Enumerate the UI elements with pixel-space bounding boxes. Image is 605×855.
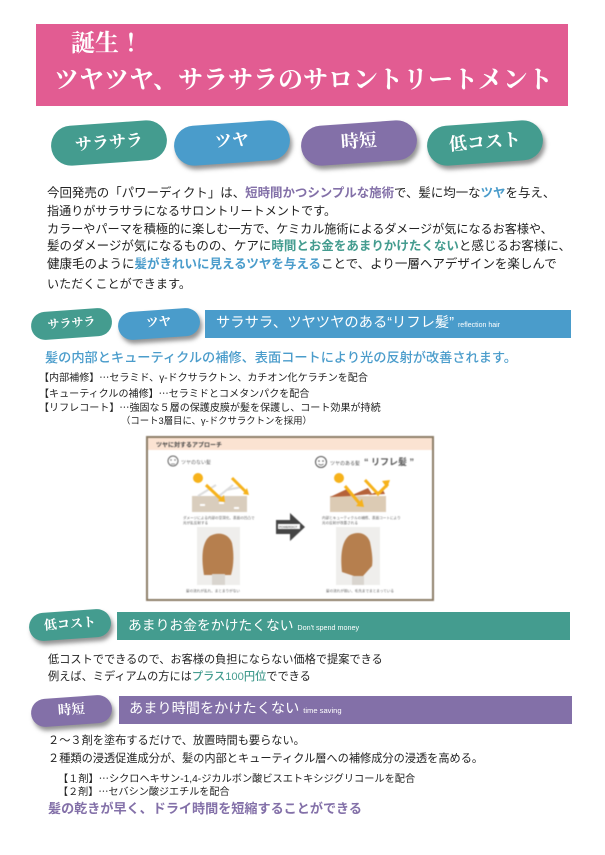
feature pill: サラサラ: サラサラ: [74, 130, 144, 154]
intro paragraph: いただくことができます。: [47, 277, 191, 291]
intro paragraph: 指通りがサラサラになるサロントリートメントです。: [47, 204, 336, 218]
section pill: 時短: [30, 694, 113, 727]
section bar: あまりお金をかけたくない: [117, 612, 570, 640]
conclusion: 髪の乾きが早く、ドライ時間を短縮することができる: [48, 801, 362, 816]
time saving text: 【１剤】…シクロヘキサン-1,4-ジカルボン酸ビスエトキシジグリコールを配合: [58, 770, 415, 785]
intro paragraph: [47, 186, 571, 291]
section bar: あまりお金をかけたくない: あまりお金をかけたくない Don't spend money: [128, 618, 359, 633]
section bar: リフレ髪: サラサラ、ツヤツヤのある“リフレ髪” reflection hair: [216, 315, 500, 331]
feature pill: 時短: 時短: [340, 129, 378, 152]
feature pill: 低コスト: 低コスト: [448, 129, 522, 154]
title banner: [36, 24, 568, 106]
feature pill: ツヤ: ツヤ: [214, 129, 249, 151]
section pill: ツヤ: [117, 307, 200, 340]
right: face icon and heading: “ リフレ髪 ”: [364, 456, 414, 467]
intro paragraph: 健康毛のように髪がきれいに見えるツヤを与えることで、より一層ヘアデザインを楽しんで: [47, 257, 557, 271]
diagram: approach to shine: [145, 435, 435, 602]
arrow: [276, 513, 305, 541]
section bar: あまり時間をかけたくない: [119, 696, 572, 724]
section pill: サラサラ: [30, 307, 113, 340]
diagram: approach to shine: ツヤに対するアプローチ: [156, 441, 222, 449]
right photo caption: 髪の流れが揃い、毛先までまとまっている: [326, 588, 394, 593]
feature pill: 時短: [300, 119, 418, 166]
ingredient list: 【内部補修】…セラミド、γ-ドクサラクトン、カチオン化ケラチンを配合: [39, 369, 368, 384]
feature pill: サラサラ: [50, 119, 168, 166]
right caption: 内部とキューティクルの補修、表面コートにより: [322, 515, 401, 520]
left caption: ダメージによる内部の空洞化、表面の凹凸で: [183, 515, 255, 520]
right caption: 光の反射が改善される: [322, 520, 358, 525]
left: face icon and heading: [168, 456, 211, 466]
left caption: 光が乱反射する: [183, 520, 209, 525]
title line 2: ツヤツヤ、サラサラのサロントリートメント: [54, 67, 553, 94]
cost text: 低コストでできるので、お客様の負担にならない価格で提案できる: [48, 654, 383, 666]
section pill: 低コスト: [28, 608, 111, 641]
section bar: リフレ髪: [205, 310, 571, 338]
time saving text: ２～３剤を塗布するだけで、放置時間も要らない。: [48, 735, 305, 747]
cost text: [48, 653, 383, 683]
section headline: 髪の内部とキューティクルの補修、表面コートにより光の反射が改善されます。: [45, 350, 517, 365]
right: face icon and heading: [316, 456, 414, 468]
title line 1: 誕生！: [71, 31, 143, 57]
intro paragraph: 髪のダメージが気になるものの、ケアに時間とお金をあまりかけたくないと感じるお客様に、: [47, 239, 571, 253]
right: hair photo: [336, 527, 380, 585]
time saving text: 【２剤】…セバシン酸ジエチルを配合: [58, 783, 230, 798]
time saving text: ２種類の浸透促進成分が、髪の内部とキューティクル層への補修成分の浸透を高める。: [48, 753, 483, 765]
left: face icon and heading: ツヤのない髪: [181, 459, 211, 466]
section pill: ツヤ: ツヤ: [145, 314, 171, 329]
right: repaired hair surface: [330, 473, 390, 512]
left photo caption: 髪の流れが乱れ、まとまりがない: [186, 588, 240, 593]
time saving text: [48, 734, 483, 798]
section pill: サラサラ: サラサラ: [47, 314, 96, 331]
intro paragraph: カラーやパーマを積極的に楽しむ一方で、ケミカル施術によるダメージが気になるお客様や、: [47, 222, 553, 236]
right: face icon and heading: ツヤのある髪: [330, 460, 360, 467]
cost text: 例えば、ミディアムの方にはプラス100円位でできる: [48, 671, 311, 683]
section bar: あまり時間をかけたくない: あまり時間をかけたくない time saving: [129, 701, 342, 717]
left: hair photo: [197, 527, 240, 585]
section pill: 時短: 時短: [57, 701, 85, 717]
feature pill: 低コスト: [426, 119, 544, 166]
ingredient list: [39, 369, 381, 426]
arrow: POWERDICT: [279, 525, 298, 529]
feature pill: ツヤ: [173, 119, 291, 166]
intro paragraph: 今回発売の「パワーディクト」は、短時間かつシンプルな施術で、髪に均一なツヤを与え、: [47, 186, 555, 200]
section pill: 低コスト: 低コスト: [43, 614, 96, 632]
ingredient list: 【リフレコート】…強固な５層の保護皮膜が髪を保護し、コート効果が持続: [39, 399, 381, 414]
left: damaged hair surface: [192, 473, 249, 512]
ingredient list: 【キューティクルの補修】…セラミドとコメタンパクを配合: [39, 385, 309, 400]
ingredient list: （コート3層目に、γ-ドクサラクトンを採用）: [121, 415, 312, 426]
